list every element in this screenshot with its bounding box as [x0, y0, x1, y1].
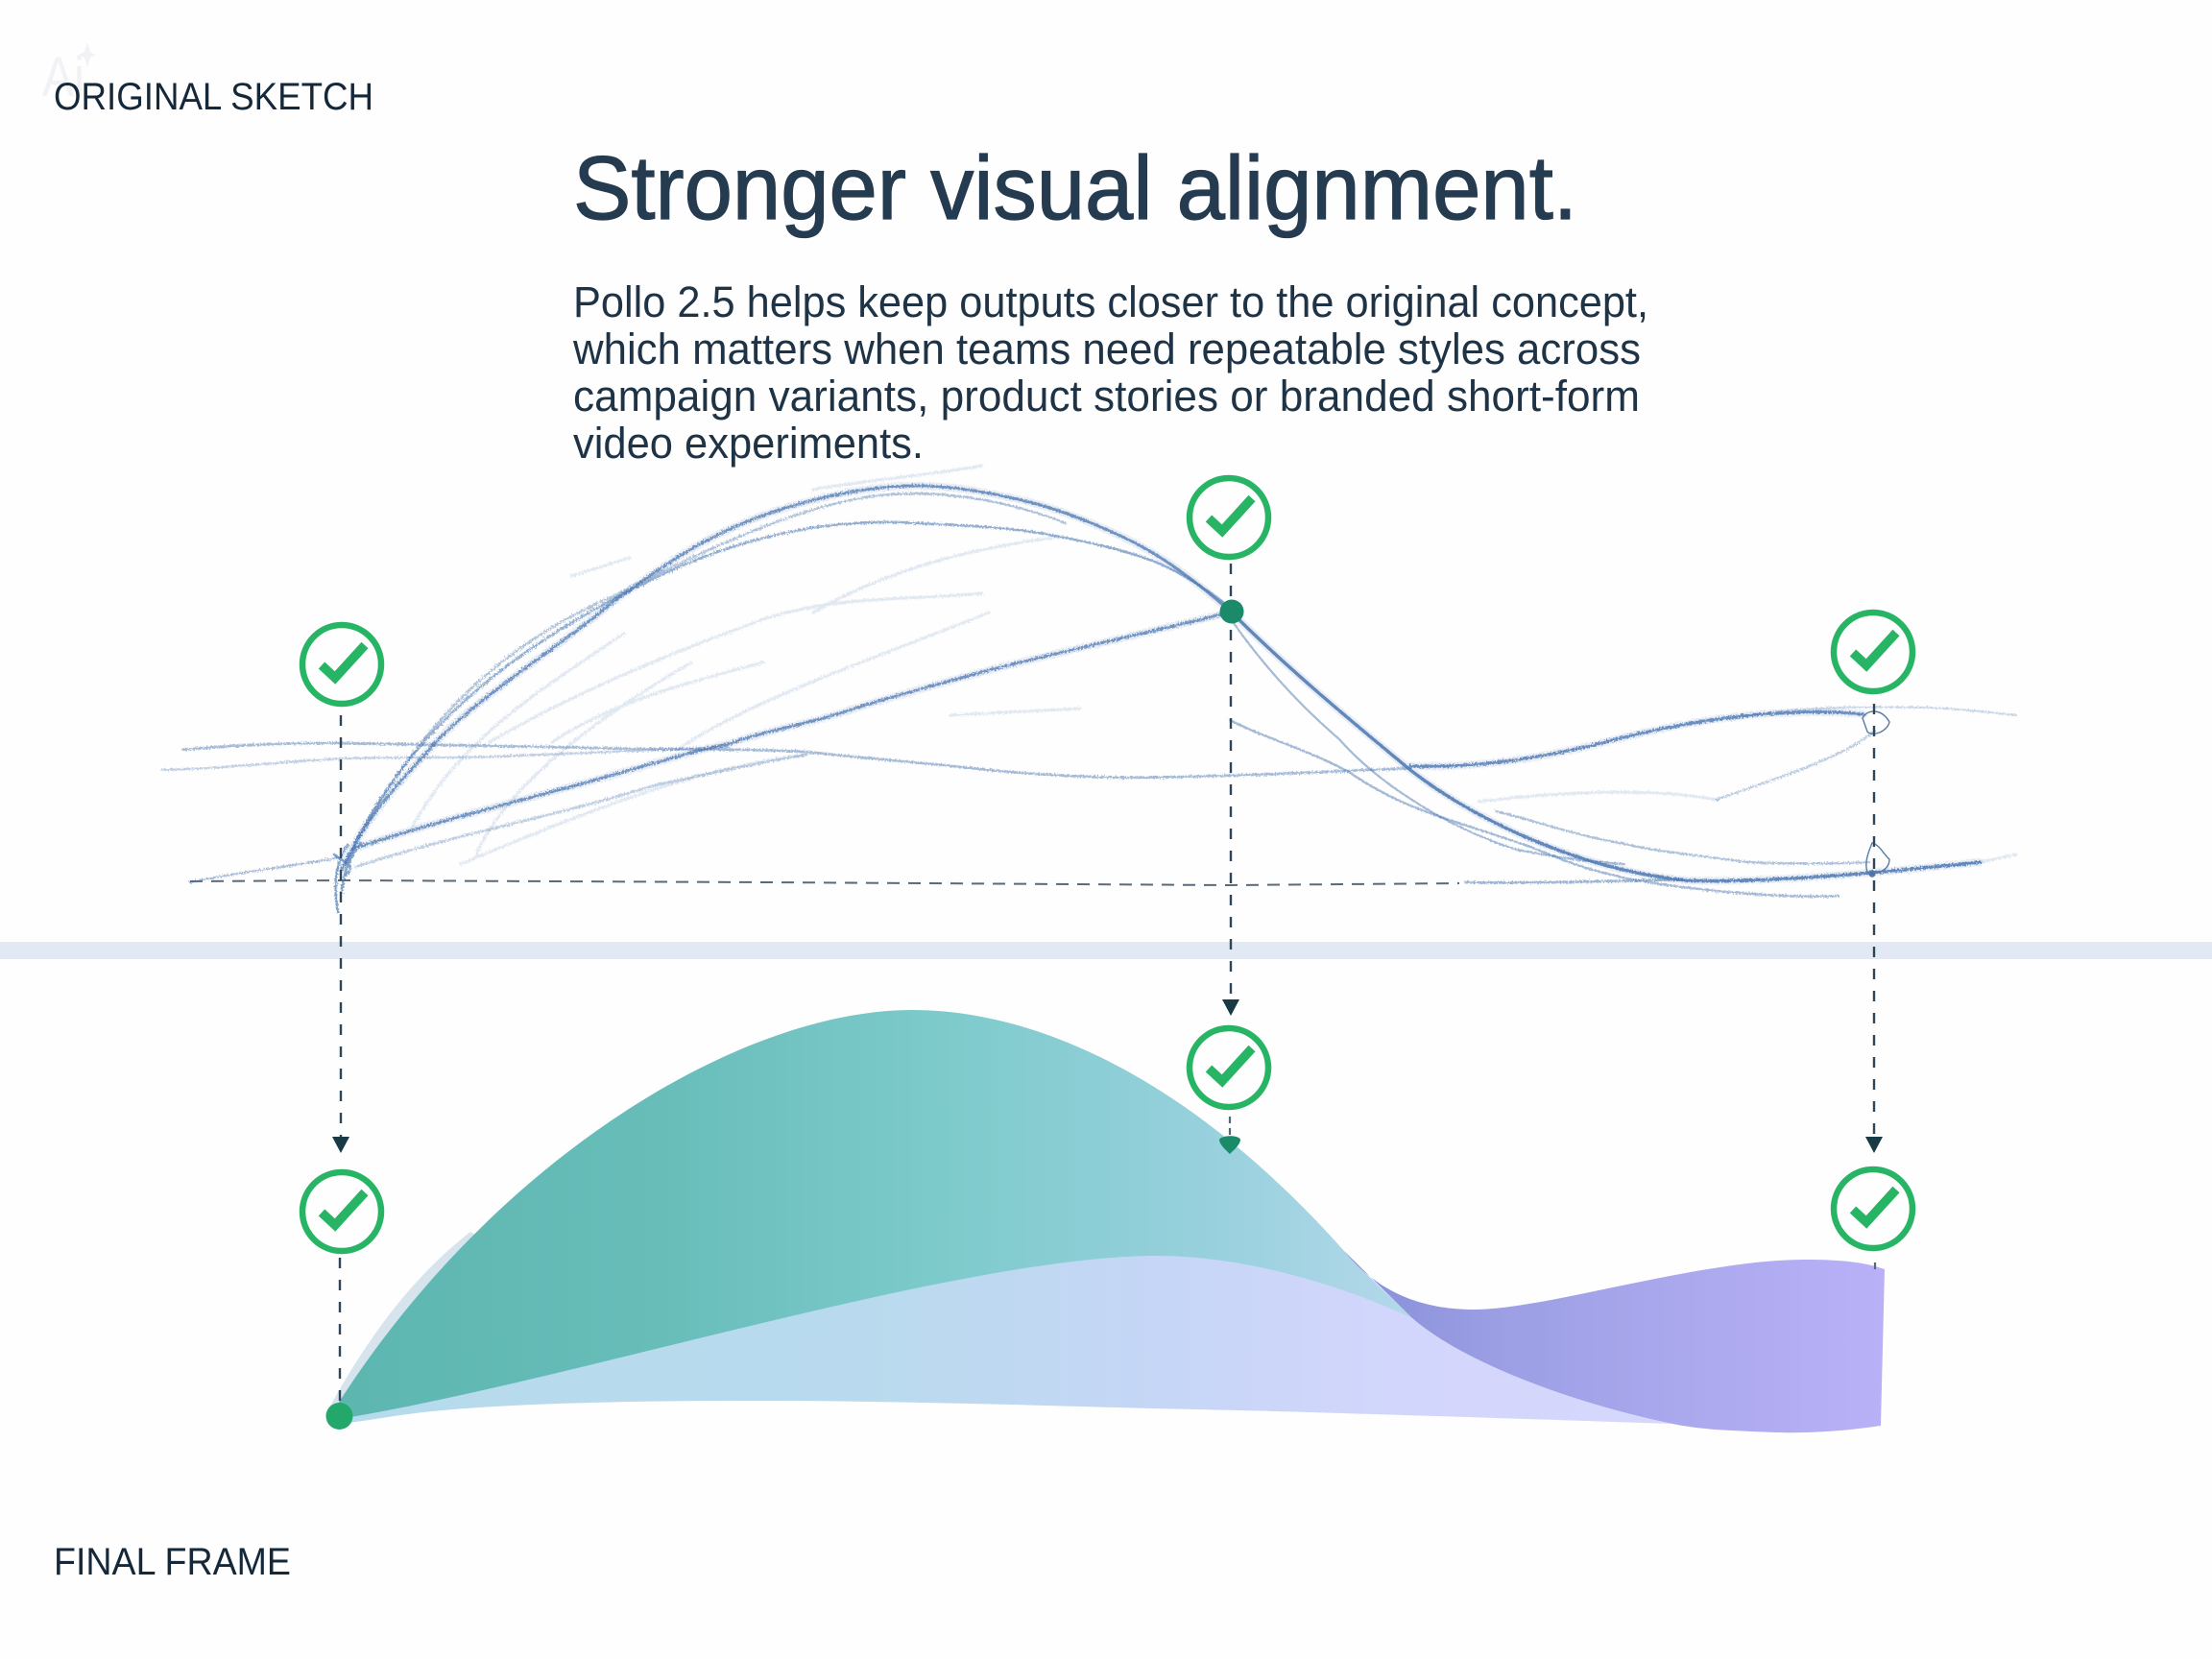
- sketch: faint hatching: [413, 466, 2016, 864]
- check: final middle: [1190, 1028, 1268, 1107]
- final frame: purple shape: [1344, 1251, 1885, 1432]
- body text: video experiments.: [573, 419, 924, 468]
- body text: campaign variants, product stories or branded short-form: [573, 372, 1640, 421]
- check: final left: [302, 1172, 381, 1251]
- guide: right dashed arrow: [1865, 704, 1883, 1269]
- marker: final frame midpoint: [1219, 1136, 1240, 1154]
- sketch: upper right curve: [1410, 712, 1863, 766]
- guide: middle dashed arrow: [1222, 564, 1239, 1139]
- sketch: right marker ticks: [1863, 711, 1889, 877]
- final frame: pale sliver: [328, 1232, 480, 1416]
- sketch: main upper arc: [342, 486, 1232, 869]
- final frame: lavender shape: [339, 1256, 1672, 1424]
- sketch: lower right companion: [1496, 811, 1869, 864]
- check: sketch middle: [1190, 478, 1268, 557]
- body text: [572, 277, 1648, 468]
- sketch: descending curve: [1232, 613, 1980, 881]
- sketch: return stroke: [1717, 731, 1875, 800]
- dot: sketch midpoint: [1219, 599, 1244, 624]
- sketch: second arc: [348, 522, 1229, 859]
- sketch: descending companion: [1229, 616, 1624, 864]
- body text: Pollo 2.5 helps keep outputs closer to the original concept,: [573, 277, 1648, 326]
- title: Stronger visual alignment.: [573, 137, 1577, 238]
- sketch: lower horizontal line: [161, 747, 729, 770]
- sketch: upper horizontal line: [182, 743, 1410, 778]
- sketch: soft underlay of main curves: [342, 486, 1980, 881]
- sketch: origin knot: [334, 843, 361, 912]
- label: original sketch: ORIGINAL SKETCH: [54, 76, 373, 118]
- check: sketch right: [1834, 613, 1912, 691]
- sketch drawing: [161, 466, 2016, 912]
- divider band: [0, 942, 2212, 959]
- sketch: lower left stroke: [355, 755, 806, 867]
- sketch: horizontal lower line: [1465, 879, 1686, 882]
- horizontal dashed baseline: [190, 880, 1459, 885]
- label: final frame: FINAL FRAME: [54, 1541, 291, 1583]
- sketch: upper right faint extension: [1728, 707, 2016, 720]
- watermark: Ai: Ai: [42, 46, 84, 108]
- sketch: lower crossing line: [1230, 720, 1839, 897]
- check: final right: [1834, 1169, 1912, 1248]
- check: sketch left: [302, 625, 381, 704]
- sketch: third arc: [346, 493, 1066, 864]
- guide: left dashed arrow: [332, 715, 349, 1411]
- sketch: ground stroke left: [190, 857, 341, 882]
- sketch: straight rising line: [353, 614, 1221, 849]
- body text: which matters when teams need repeatable styles across: [572, 325, 1641, 373]
- dot: final frame origin: [326, 1403, 353, 1430]
- final frame: teal shape: [333, 1010, 1412, 1419]
